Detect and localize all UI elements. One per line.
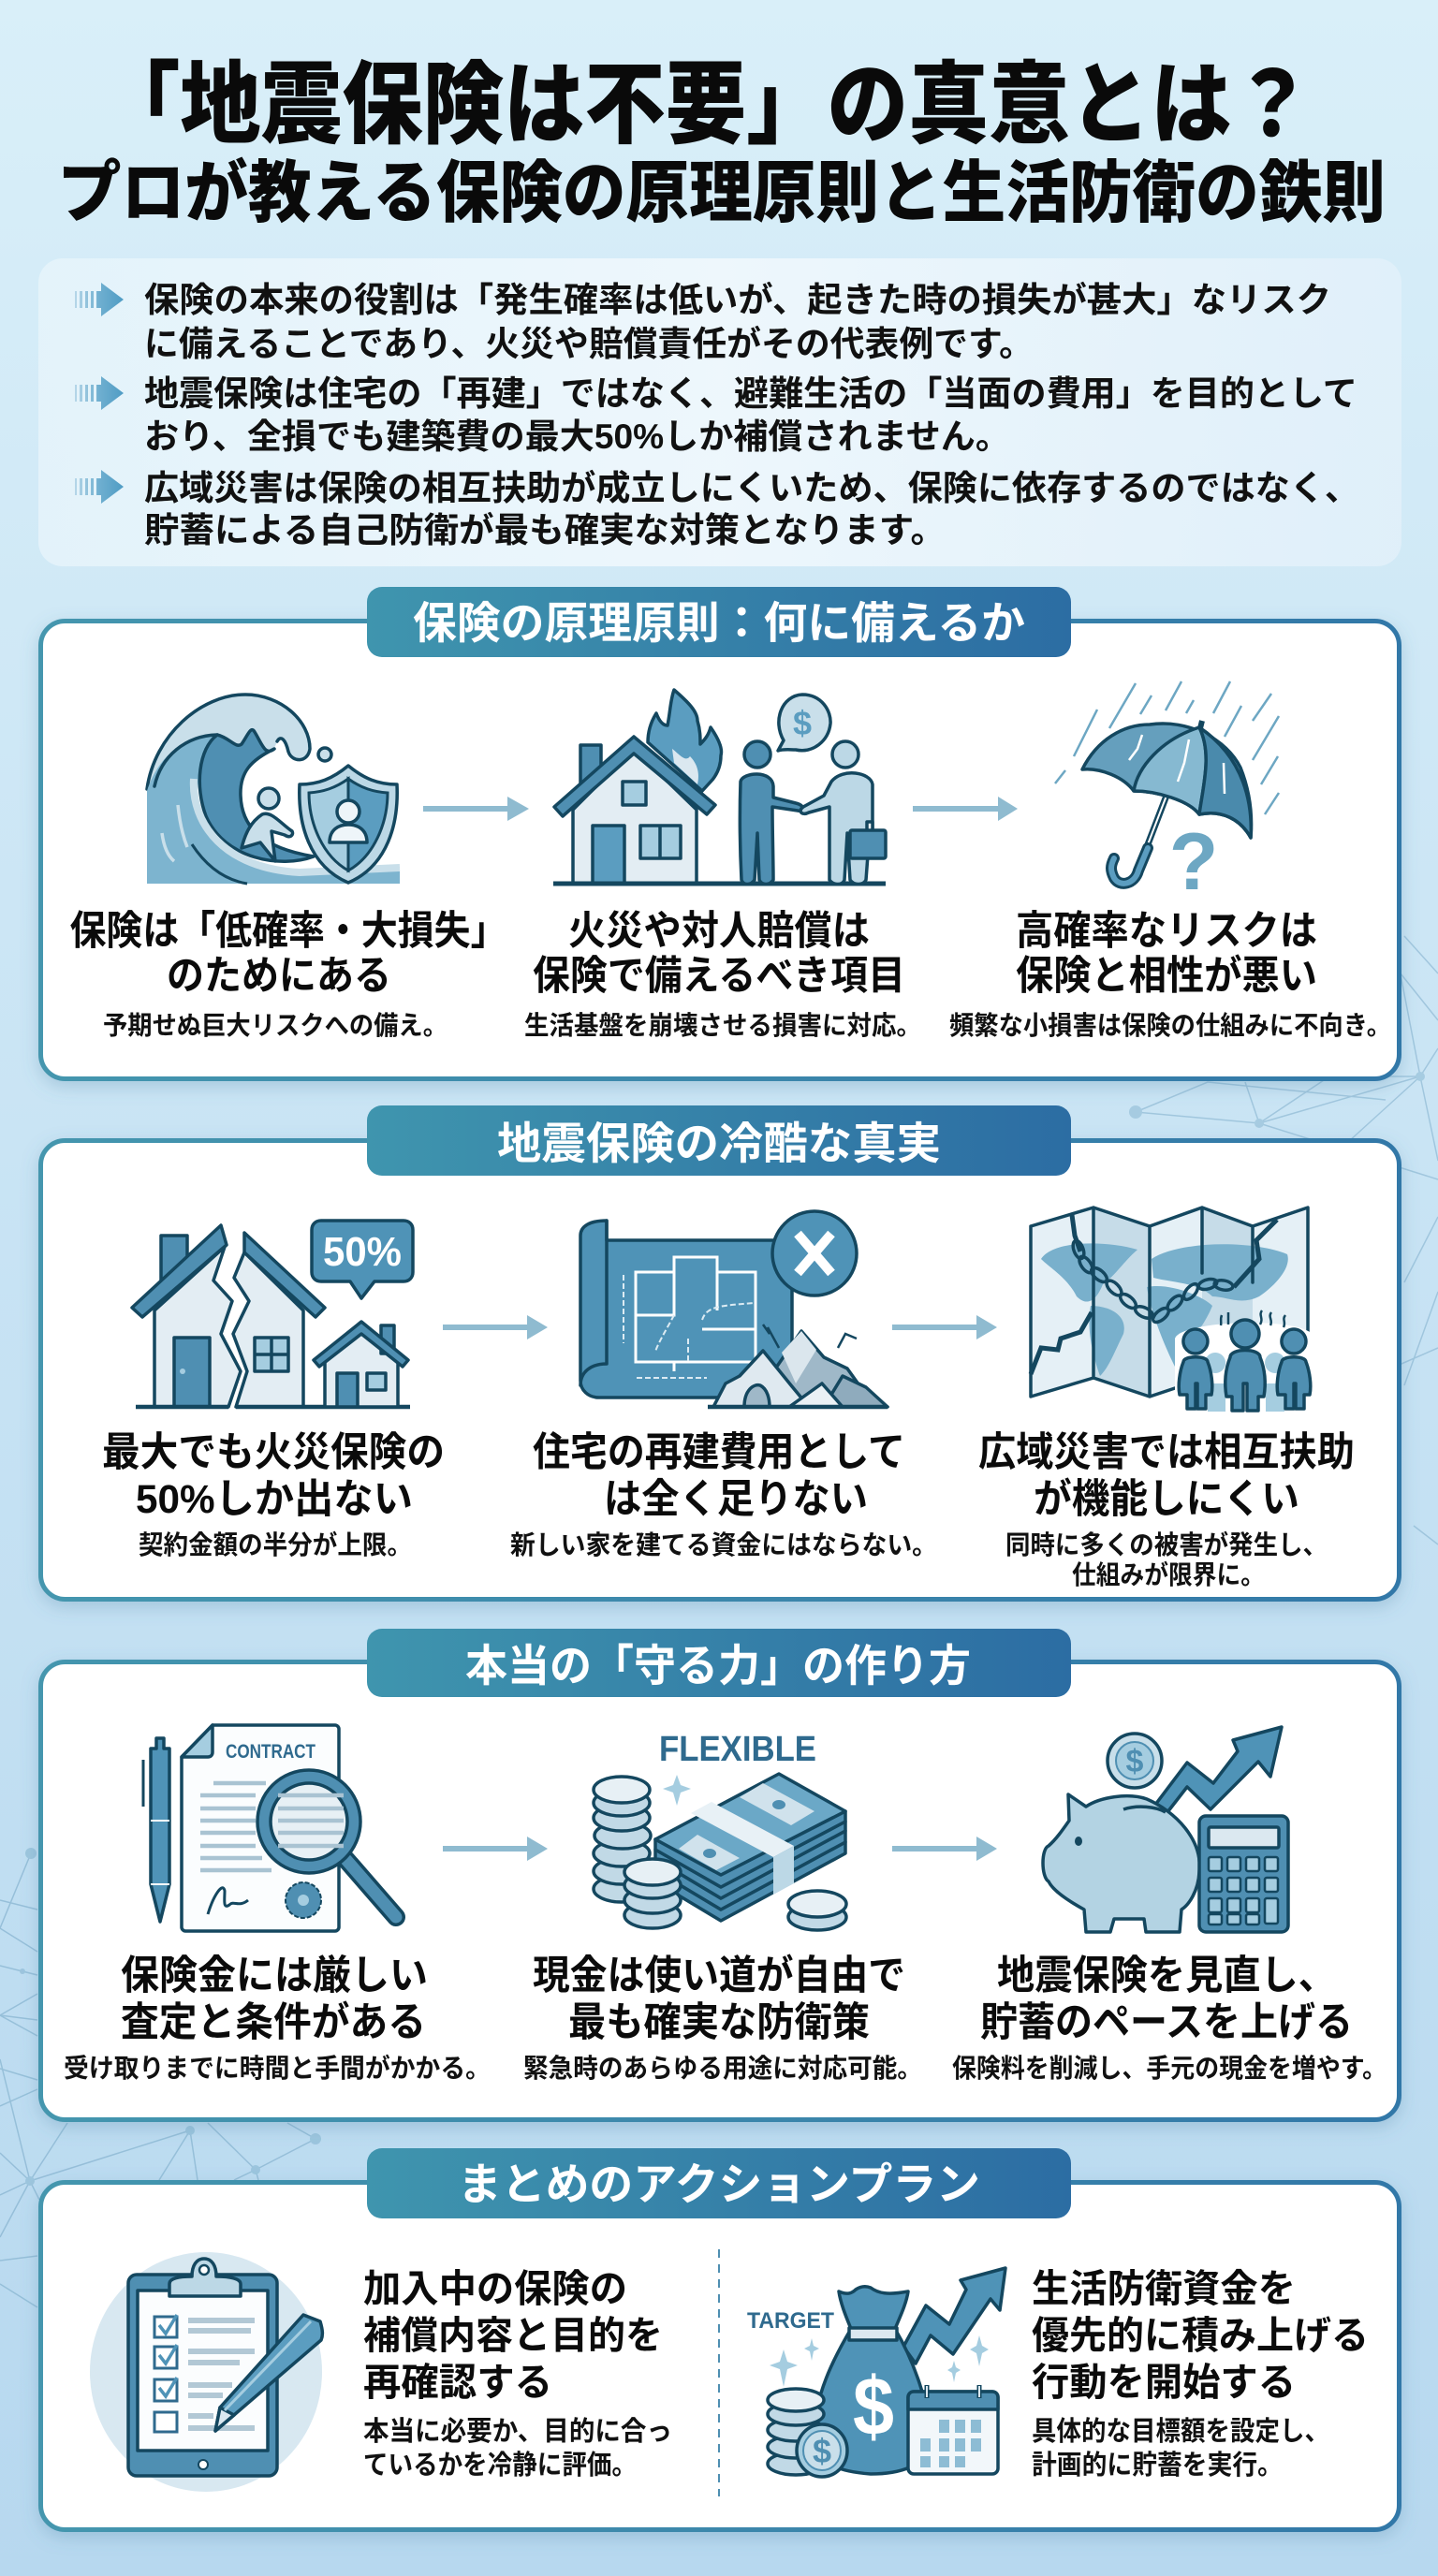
arrow: protect 1 to 2 bbox=[443, 1837, 548, 1861]
icon: blueprint and rubble bbox=[580, 1211, 888, 1407]
text: action 1: 再確認する bbox=[363, 2361, 552, 2404]
icon: wave and shield bbox=[147, 695, 400, 884]
icon: burning house and handshake bbox=[553, 690, 886, 884]
text: action 1: 加入中の保険の bbox=[363, 2267, 627, 2310]
heading: how to build protection: 本当の「守る力」の作り方 bbox=[465, 1641, 971, 1690]
icon: cash and coins: FLEXIBLE bbox=[659, 1730, 816, 1769]
heading: harsh truth: 地震保険の冷酷な真実 bbox=[497, 1119, 941, 1168]
text: principle column 2 bbox=[524, 909, 921, 1040]
text: truth column 3: 広域災害では相互扶助 bbox=[978, 1430, 1355, 1475]
text: protect column 1 bbox=[64, 1954, 491, 2083]
text: action 2: 具体的な目標額を設定し、 bbox=[1032, 2416, 1329, 2447]
text: protect column 3: 貯蓄のペースを上げる bbox=[980, 2000, 1353, 2045]
text: protect column 1: 査定と条件がある bbox=[121, 2000, 426, 2045]
text: action 2 bbox=[1032, 2267, 1369, 2481]
text: principle column 3 bbox=[949, 909, 1391, 1040]
text: protect column 2: 最も確実な防衛策 bbox=[568, 2000, 870, 2045]
icon: clipboard checklist and pencil bbox=[90, 2252, 322, 2492]
text: principle column 1: 保険は「低確率・大損失」 bbox=[69, 909, 507, 954]
icon: contract and magnifier bbox=[143, 1725, 396, 1931]
arrow: truth 2 to 3 bbox=[892, 1315, 997, 1339]
text: point 2 bbox=[144, 374, 1357, 456]
icon: money bag target and calendar: TARGET bbox=[747, 2308, 834, 2334]
text: action 2: 生活防衛資金を bbox=[1032, 2267, 1296, 2310]
icon: money bag target and calendar: $ bbox=[813, 2432, 831, 2470]
text: point 1: 保険の本来の役割は「発生確率は低いが、起きた時の損失が甚大」なリスク bbox=[144, 281, 1331, 319]
heading: principles bbox=[367, 587, 1071, 657]
heading: harsh truth bbox=[367, 1105, 1071, 1176]
icon: world map with chain and people bbox=[1031, 1208, 1315, 1423]
text: protect column 3: 保険料を削減し、手元の現金を増やす。 bbox=[952, 2054, 1387, 2083]
text: principle column 3: 保険と相性が悪い bbox=[1016, 954, 1317, 999]
text: truth column 2: は全く足りない bbox=[604, 1477, 868, 1522]
arrow: truth 1 to 2 bbox=[443, 1315, 548, 1339]
text: principle column 2: 生活基盤を崩壊させる損害に対応。 bbox=[524, 1011, 921, 1040]
heading: action plan bbox=[367, 2148, 1071, 2218]
heading: action plan: まとめのアクションプラン bbox=[458, 2159, 980, 2209]
icon: piggy bank and calculator: $ bbox=[1126, 1744, 1144, 1779]
text: action 1: 本当に必要か、目的に合っ bbox=[363, 2416, 672, 2447]
title bbox=[58, 55, 1386, 231]
text: principle column 3: 高確率なリスクは bbox=[1016, 909, 1317, 954]
text: truth column 1: 50%しか出ない bbox=[136, 1477, 413, 1522]
title: 「地震保険は不要」の真意とは？ bbox=[99, 55, 1313, 155]
icon: bullet arrow 3 bbox=[75, 470, 124, 504]
text: point 3 bbox=[144, 469, 1359, 549]
text: truth column 2: 住宅の再建費用として bbox=[533, 1430, 905, 1475]
icon: contract and magnifier: CONTRACT bbox=[226, 1741, 315, 1763]
text: truth column 3: 同時に多くの被害が発生し、 bbox=[1005, 1530, 1328, 1559]
text: action 1: 補償内容と目的を bbox=[363, 2314, 663, 2357]
text: principle column 2: 火災や対人賠償は bbox=[568, 909, 870, 954]
icon: burning house and handshake: $ bbox=[793, 704, 812, 742]
panel: action plan bbox=[41, 2148, 1399, 2529]
icon: bullet arrow 1 bbox=[75, 283, 124, 316]
icon: cracked house with 50 percent bbox=[132, 1221, 413, 1407]
heading: how to build protection bbox=[367, 1629, 1071, 1697]
text: protect column 3: 地震保険を見直し、 bbox=[997, 1954, 1336, 1998]
icon: cash and coins bbox=[594, 1730, 846, 1930]
text: truth column 2 bbox=[510, 1430, 937, 1559]
text: truth column 2: 新しい家を建てる資金にはならない。 bbox=[510, 1530, 937, 1559]
text: principle column 3: 頻繁な小損害は保険の仕組みに不向き。 bbox=[949, 1011, 1391, 1040]
background network pattern right bbox=[1129, 936, 1438, 1544]
text: protect column 2: 緊急時のあらゆる用途に対応可能。 bbox=[523, 2054, 922, 2083]
text: truth column 1 bbox=[102, 1430, 445, 1559]
text: principle column 1: 予期せぬ巨大リスクへの備え。 bbox=[103, 1011, 448, 1040]
icon: umbrella in rain bbox=[1055, 681, 1279, 907]
text: action 2: 計画的に貯蓄を実行。 bbox=[1032, 2450, 1283, 2481]
background network pattern left bbox=[0, 1848, 321, 2307]
text: truth column 3: 仕組みが限界に。 bbox=[1072, 1559, 1265, 1589]
icon: money bag target and calendar: $ bbox=[853, 2360, 894, 2452]
divider bbox=[718, 2249, 720, 2496]
text: protect column 2 bbox=[523, 1954, 922, 2083]
text: action 2: 行動を開始する bbox=[1032, 2361, 1296, 2404]
icon: bullet arrow 2 bbox=[75, 376, 124, 410]
text: principle column 1: のためにある bbox=[167, 954, 391, 999]
text: protect column 3 bbox=[952, 1954, 1387, 2083]
icon: money bag target and calendar bbox=[747, 2268, 1005, 2477]
text: point 1 bbox=[144, 281, 1331, 363]
arrow: protect 2 to 3 bbox=[892, 1837, 997, 1861]
text: action 1 bbox=[363, 2267, 672, 2481]
heading: principles: 保険の原理原則：何に備えるか bbox=[413, 598, 1025, 648]
panel: principles bbox=[41, 587, 1399, 1078]
text: truth column 3: が機能しにくい bbox=[1034, 1477, 1299, 1522]
text: principle column 1 bbox=[69, 909, 507, 1040]
text: protect column 1: 保険金には厳しい bbox=[121, 1954, 428, 1998]
icon: umbrella in rain: ? bbox=[1169, 817, 1218, 907]
text: point 1: に備えることであり、火災や賠償責任がその代表例です。 bbox=[144, 325, 1034, 363]
panel: how to build protection bbox=[41, 1629, 1399, 2119]
text: protect column 2: 現金は使い道が自由で bbox=[533, 1954, 905, 1998]
text: truth column 1: 最大でも火災保険の bbox=[102, 1430, 445, 1475]
icon: cracked house with 50 percent: 50% bbox=[323, 1229, 402, 1275]
panel: summary bbox=[38, 258, 1401, 566]
text: truth column 3 bbox=[978, 1430, 1355, 1589]
text: principle column 2: 保険で備えるべき項目 bbox=[533, 954, 905, 999]
arrow: principle 2 to 3 bbox=[913, 797, 1018, 821]
text: point 3: 貯蓄による自己防衛が最も確実な対策となります。 bbox=[144, 511, 946, 549]
text: truth column 1: 契約金額の半分が上限。 bbox=[139, 1530, 412, 1559]
text: point 3: 広域災害は保険の相互扶助が成立しにくいため、保険に依存するのではなく、 bbox=[144, 469, 1359, 507]
text: point 2: 地震保険は住宅の「再建」ではなく、避難生活の「当面の費用」を目的として bbox=[144, 374, 1357, 413]
panel: harsh truth bbox=[41, 1105, 1399, 1599]
text: action 2: 優先的に積み上げる bbox=[1032, 2314, 1369, 2357]
text: protect column 1: 受け取りまでに時間と手間がかかる。 bbox=[64, 2053, 491, 2083]
text: action 1: ているかを冷静に評価。 bbox=[363, 2450, 637, 2481]
title: プロが教える保険の原理原則と生活防衛の鉄則 bbox=[58, 156, 1386, 231]
text: point 2: おり、全損でも建築費の最大50%しか補償されません。 bbox=[144, 417, 1010, 456]
arrow: principle 1 to 2 bbox=[423, 797, 529, 821]
icon: piggy bank and calculator bbox=[1043, 1727, 1288, 1932]
